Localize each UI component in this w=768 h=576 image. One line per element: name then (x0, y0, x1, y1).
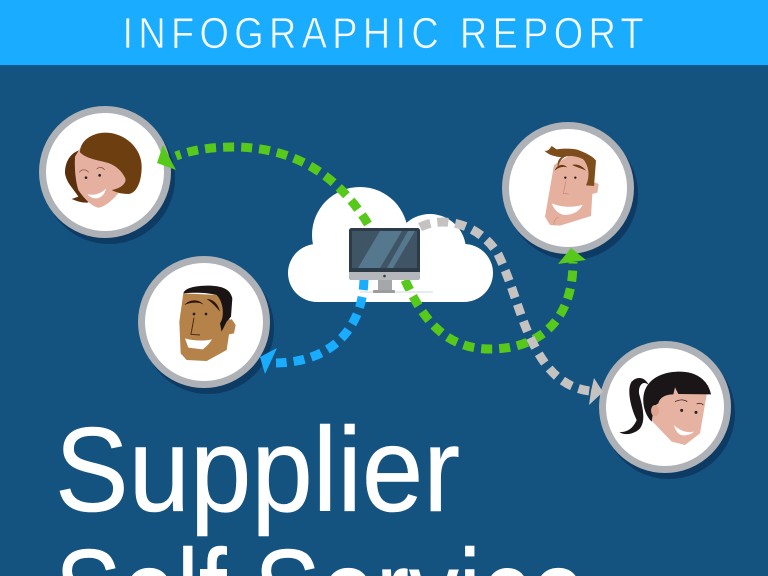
arrow: gray dashed to woman with ponytail (420, 222, 603, 405)
arrow: blue dashed to dark-skinned man (260, 279, 364, 374)
icon: desktop monitor (349, 228, 433, 293)
cloud (288, 187, 493, 302)
avatar: woman with black ponytail (602, 344, 735, 479)
arrow: green dashed to woman with brown hair (157, 145, 368, 224)
title line 1: Supplier (55, 403, 460, 537)
header band (0, 0, 768, 67)
avatar: man with light brown hair (506, 126, 638, 260)
arrow: green dashed to man with light brown hair (405, 248, 586, 349)
avatar: woman with brown hair (42, 110, 175, 244)
title (55, 403, 586, 576)
avatar: man with dark skin (142, 260, 274, 394)
header text: INFOGRAPHIC REPORT (122, 9, 644, 58)
